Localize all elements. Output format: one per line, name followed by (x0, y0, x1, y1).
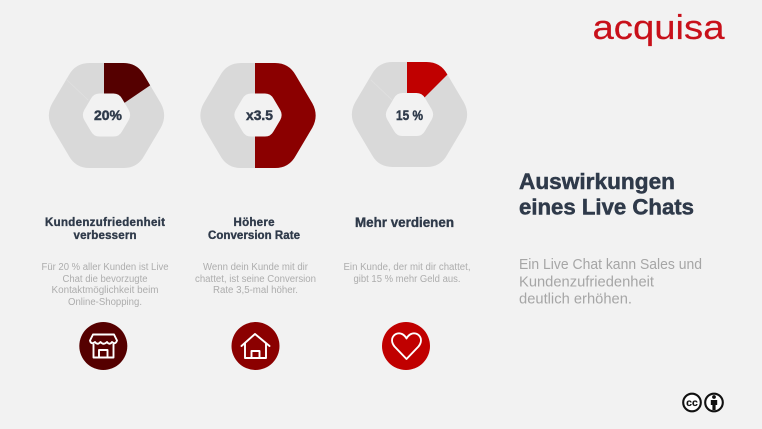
text block: Mehr verdienen (344, 262, 470, 285)
heading: Kundenzufriedenheit verbessern: Kundenzufriedenheit (45, 217, 165, 229)
text block: Kundenzufriedenheit (42, 262, 169, 308)
title: Auswirkungen eines Live Chats: Auswirkungen (519, 169, 675, 194)
hexagon donut chart: 15 %: 15 % (396, 107, 423, 123)
text block: Kundenzufriedenheit: Chat die bevorzugte (62, 274, 148, 285)
text block: Conversion Rate: Wenn dein Kunde mit dir (203, 262, 309, 273)
heading: Kundenzufriedenheit verbessern (45, 217, 165, 242)
text block: Conversion Rate (195, 262, 316, 296)
text block: Kundenzufriedenheit: Kontaktmöglichkeit beim (52, 285, 158, 296)
hexagon donut chart: 20%: 20% (94, 107, 123, 123)
text block: Kundenzufriedenheit: Online-Shopping. (68, 297, 142, 308)
hexagon donut chart: 20% (49, 63, 164, 168)
text block: description: Ein Live Chat kann Sales und (519, 256, 702, 273)
text block: Kundenzufriedenheit: Für 20 % aller Kunden ist Live (42, 262, 169, 273)
hexagon donut chart: 15 % (352, 62, 467, 167)
text block: Mehr verdienen: gibt 15 % mehr Geld aus. (354, 274, 460, 285)
text block: description: deutlich erhöhen. (519, 290, 632, 308)
text block: Conversion Rate: chattet, ist seine Conversion (195, 274, 316, 285)
hexagon donut chart: x3.5: x3.5 (246, 107, 273, 123)
text block: Mehr verdienen: Ein Kunde, der mit dir chattet, (344, 262, 470, 273)
heading: Höhere Conversion Rate: Höhere (234, 217, 274, 229)
heading: Höhere Conversion Rate: Conversion Rate (208, 230, 300, 242)
text block: Conversion Rate: Rate 3,5-mal höher. (213, 285, 298, 296)
icon: creative commons licence: cc (686, 397, 698, 409)
heading: Mehr verdienen: Mehr verdienen (355, 215, 454, 230)
icon: heart (382, 322, 430, 370)
heading: Höhere Conversion Rate (208, 217, 300, 242)
text block: description (519, 256, 702, 308)
icon: house (232, 322, 280, 370)
hexagon donut chart: x3.5 (200, 63, 316, 168)
icon: creative commons licence (683, 394, 723, 411)
icon: store (79, 322, 127, 370)
heading: Kundenzufriedenheit verbessern: verbessern (74, 230, 136, 242)
title: Auswirkungen eines Live Chats: eines Live Chats (519, 194, 694, 220)
title: Auswirkungen eines Live Chats (519, 169, 694, 220)
logo: acquisa: acquisa (592, 9, 725, 47)
text block: description: Kundenzufriedenheit (519, 274, 655, 290)
